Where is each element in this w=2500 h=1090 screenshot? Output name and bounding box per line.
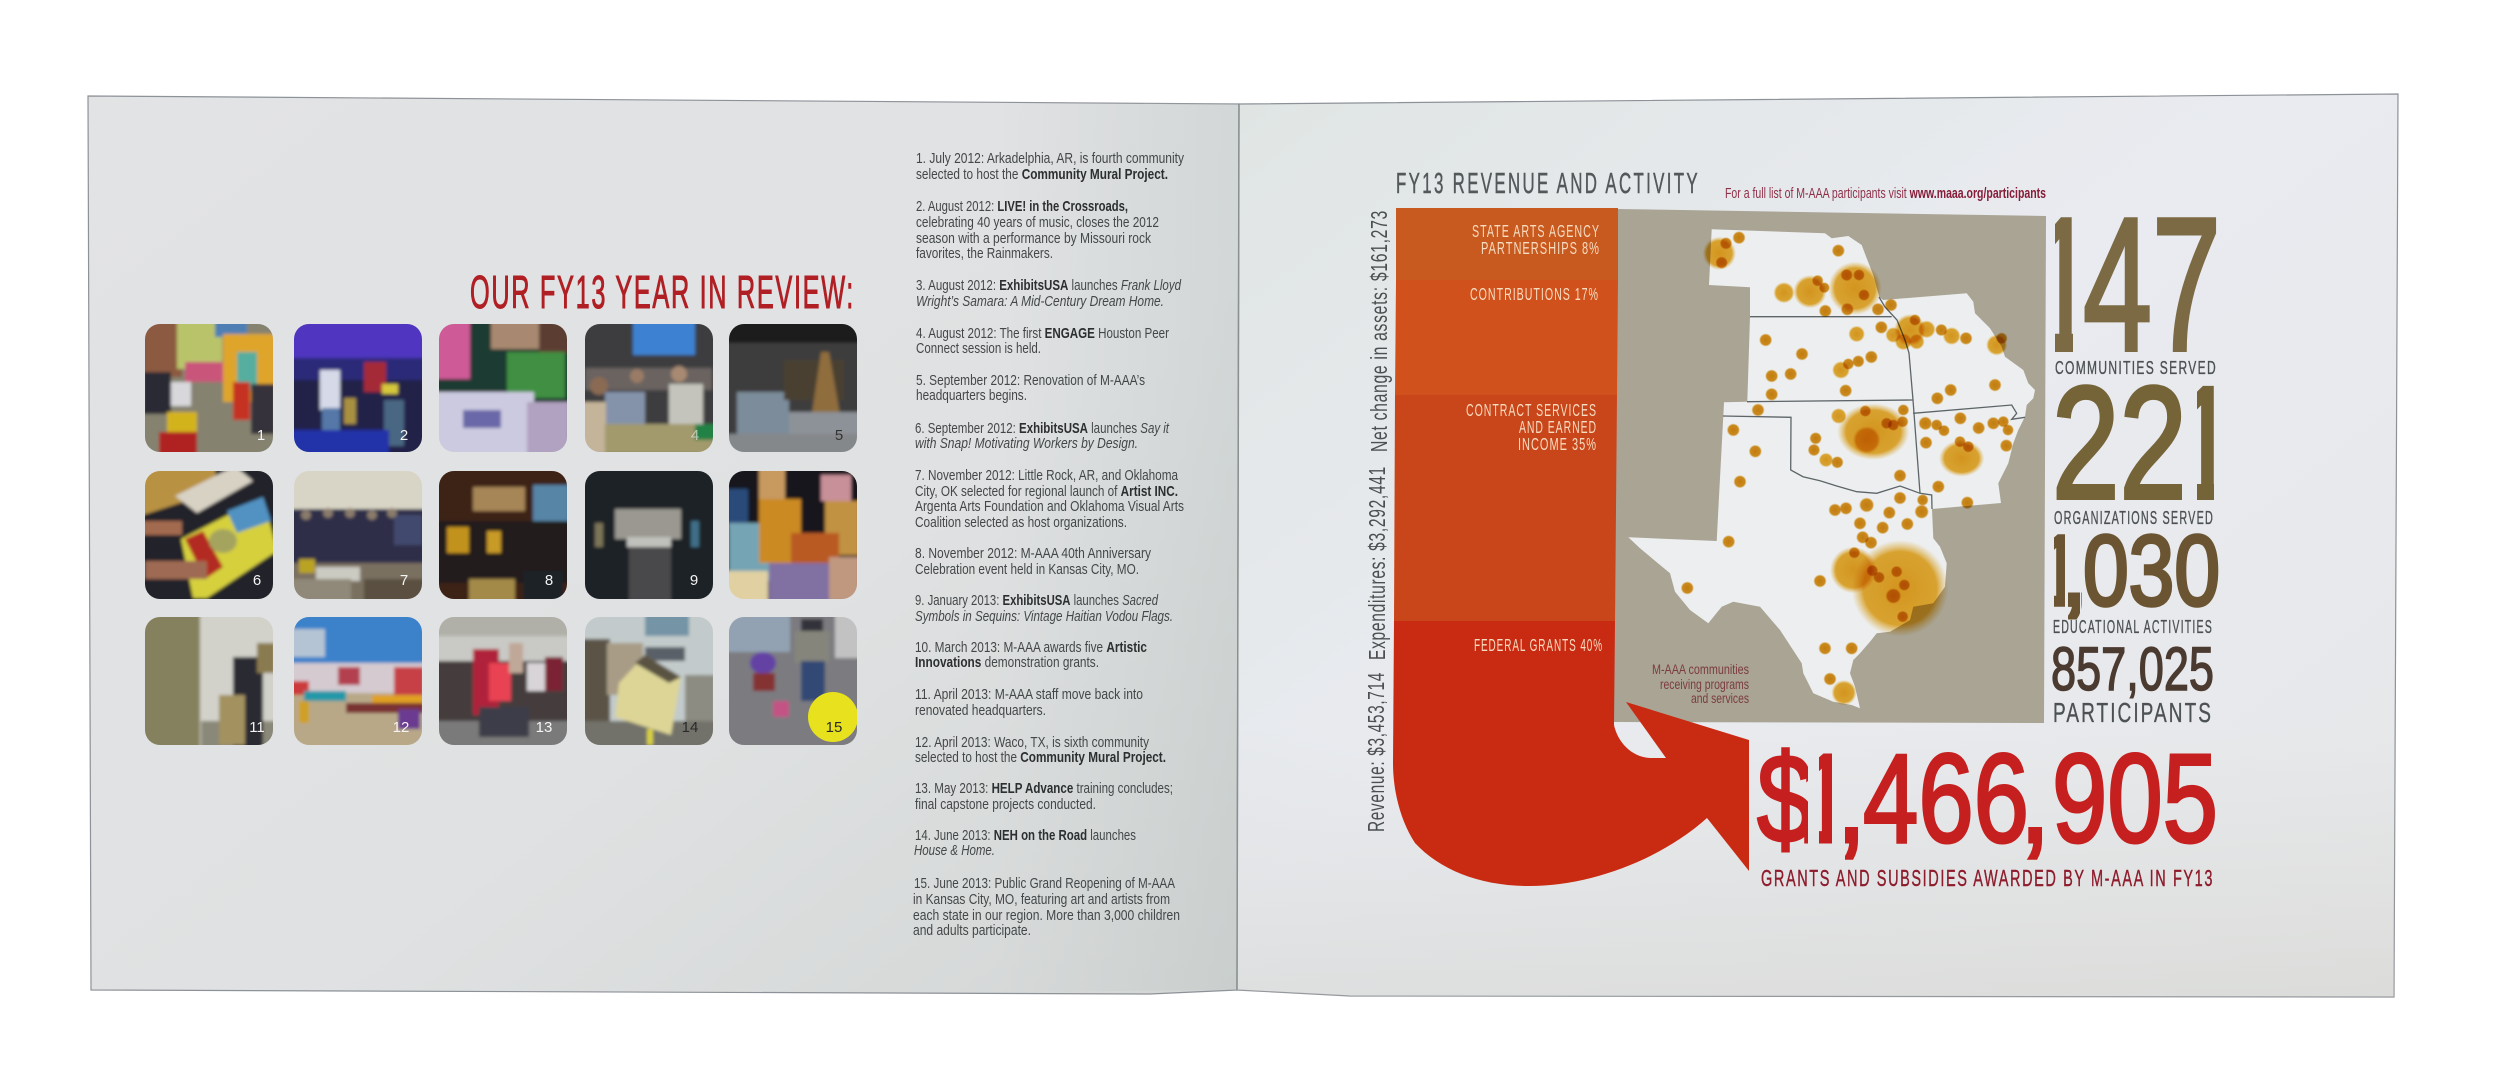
stat: communities served: 47: [2083, 179, 2221, 391]
timeline text list: 11. April 2013: M-AAA staff move back into: [915, 687, 1143, 703]
bar labels: CONTRACT SERVICES: [1466, 400, 1597, 420]
bar labels: FEDERAL GRANTS 40%: [1474, 635, 1603, 655]
timeline text list: 7. November 2012: Little Rock, AR, and Oklahoma: [915, 468, 1179, 484]
timeline text list: favorites, the Rainmakers.: [916, 246, 1053, 262]
vertical financial summary: Revenue: $3,453,714: [1363, 672, 1389, 832]
bar labels: [1466, 221, 1603, 655]
photo 13: HELP Advance group: [439, 617, 567, 745]
map legend: receiving programs: [1660, 676, 1749, 692]
big number: grants and subsidies: 466: [1863, 728, 2029, 869]
timeline text list: 4. August 2012: The first ENGAGE Houston Peer: [916, 326, 1169, 342]
timeline text list: each state in our region. More than 3,000 children: [913, 908, 1180, 924]
arrow: federal grants flowing to awards: [1393, 621, 1749, 886]
revenue stacked bar: [1394, 208, 1618, 622]
photo 15: public reopening: [729, 617, 857, 745]
timeline text list: Coalition selected as host organizations.: [915, 515, 1127, 531]
big number: grants and subsidies: $: [1757, 728, 1813, 869]
bar labels: INCOME 35%: [1518, 434, 1597, 454]
photo 12: Waco mural: 12: [393, 719, 409, 736]
vertical financial summary: Net change in assets: $161,273: [1366, 210, 1392, 452]
stat: participants: PARTICIPANTS: [2053, 697, 2213, 728]
map legend: M-AAA communities: [1652, 661, 1749, 677]
photo 6: hands on artwork: 6: [253, 572, 261, 589]
photo 9: gallery: 9: [690, 572, 698, 589]
region outline: [1628, 229, 2035, 708]
stat: organizations served: ORGANIZATIONS SERVED: [2054, 508, 2214, 528]
photo 10: performers with masks: [729, 471, 857, 599]
photo 5: renovation: [729, 324, 857, 452]
timeline text list: 10. March 2013: M-AAA awards five Artistic: [915, 640, 1147, 656]
stat: communities served: COMMUNITIES SERVED: [2055, 358, 2217, 378]
community dots north: [1703, 231, 2014, 509]
photo 7: group portrait: 7: [400, 572, 408, 589]
stat: educational activities: [2054, 533, 2218, 634]
stat: organizations served: 22: [2052, 353, 2187, 532]
timeline text list: selected to host the Community Mural Project.: [916, 167, 1168, 183]
stat: communities served: [2055, 217, 2216, 374]
timeline text list: House & Home.: [914, 843, 995, 859]
panel: right page: [1237, 94, 2398, 997]
bar labels: AND EARNED: [1519, 417, 1597, 437]
timeline text list: Symbols in Sequins: Vintage Haitian Vodou Flags.: [915, 609, 1173, 625]
timeline text list: and adults participate.: [913, 923, 1031, 939]
timeline text list: renovated headquarters.: [915, 703, 1046, 719]
community dots south: [1681, 491, 1948, 705]
timeline text list: 2. August 2012: LIVE! in the Crossroads,: [916, 199, 1128, 215]
timeline text list: celebrating 40 years of music, closes the 2012: [916, 215, 1159, 231]
stat: participants: [2051, 635, 2214, 728]
map of region: [1628, 229, 2035, 708]
photo 11: staff moving boxes: 11: [249, 719, 265, 736]
photo 6: hands on artwork: [145, 471, 273, 599]
timeline text list: headquarters begins.: [916, 388, 1027, 404]
photo 14: NEH house exhibit: 14: [682, 719, 698, 736]
timeline text list: 8. November 2012: M-AAA 40th Anniversary: [915, 546, 1152, 562]
vertical financial summary: Expenditures: $3,292,441: [1364, 466, 1390, 660]
timeline text list: 9. January 2013: ExhibitsUSA launches Sacred: [915, 593, 1159, 609]
photo 4: meeting room: 4: [691, 427, 699, 444]
timeline text list: 12. April 2013: Waco, TX, is sixth community: [915, 735, 1150, 751]
timeline text list: 5. September 2012: Renovation of M-AAA’s: [916, 373, 1145, 389]
timeline text list: Celebration event held in Kansas City, MO.: [915, 562, 1139, 578]
timeline text list: 13. May 2013: HELP Advance training concludes;: [915, 781, 1173, 797]
photo 9: gallery: [585, 471, 713, 599]
timeline text list: in Kansas City, MO, featuring art and artists from: [913, 892, 1170, 908]
photo 13: HELP Advance group: 13: [536, 719, 552, 736]
timeline text list: 14. June 2013: NEH on the Road launches: [915, 828, 1136, 844]
title: our FY13 year in review: OUR FY13 YEAR IN REVIEW:: [470, 266, 855, 318]
timeline text list: 15. June 2013: Public Grand Reopening of M-AAA: [914, 876, 1175, 892]
photo 11: staff moving boxes: [145, 617, 273, 745]
bar labels: STATE ARTS AGENCY: [1472, 221, 1600, 241]
stat: educational activities: EDUCATIONAL ACTIVITIES: [2053, 617, 2213, 637]
timeline text list: [913, 151, 1185, 939]
brochure spread photo: [87, 93, 2399, 998]
timeline text list: season with a performance by Missouri rock: [916, 231, 1152, 247]
stat: communities served: 1: [2032, 179, 2095, 391]
timeline text list: 3. August 2012: ExhibitsUSA launches Frank Lloyd: [916, 278, 1182, 294]
photo 8: anniversary celebration: [439, 471, 567, 599]
big number: grants and subsidies: 905: [2052, 728, 2218, 869]
photo 8: anniversary celebration: 8: [545, 572, 553, 589]
timeline text list: with Snap! Motivating Workers by Design.: [915, 436, 1138, 452]
photo 1: mural: [145, 324, 273, 452]
photo 7: group portrait: [294, 471, 422, 599]
photo 2: band on stage: [294, 324, 422, 452]
map background panel: [1613, 209, 2046, 723]
photo 2: band on stage: 2: [400, 427, 408, 444]
map legend: [1652, 661, 1749, 706]
state borders: [1723, 297, 2025, 509]
stat: organizations served: 1: [2174, 353, 2236, 532]
stat: educational activities: 1: [2038, 515, 2082, 627]
vertical financial summary: [1363, 210, 1392, 832]
photo 14: NEH house exhibit: [585, 617, 713, 745]
photo 15: public reopening: 15: [826, 719, 842, 736]
photo 1: mural: 1: [257, 427, 265, 444]
timeline text list: Innovations demonstration grants.: [915, 655, 1099, 671]
photo 5: renovation: 5: [835, 427, 843, 444]
note: participants link: For a full list of M-AAA participants visit www.maaa.org/participants: [1725, 186, 2046, 202]
bar labels: CONTRIBUTIONS 17%: [1470, 284, 1599, 304]
timeline text list: 1. July 2012: Arkadelphia, AR, is fourth community: [916, 151, 1185, 167]
panel: left page: [88, 96, 1239, 994]
bar labels: PARTNERSHIPS 8%: [1481, 238, 1600, 258]
timeline text list: Connect session is held.: [916, 341, 1041, 357]
photo 4: meeting room: [585, 324, 713, 452]
stat: participants: 857,025: [2051, 635, 2214, 703]
timeline text list: final capstone projects conducted.: [915, 797, 1096, 813]
stat: educational activities: 030: [2083, 515, 2220, 627]
stat: educational activities: ,: [2059, 515, 2090, 627]
heading: FY13 revenue and activity: FY13 REVENUE AND ACTIVITY: [1396, 168, 1700, 200]
map legend: and services: [1691, 690, 1749, 706]
photo grid: [140, 319, 861, 749]
big number: grants and subsidies: ,: [2019, 728, 2051, 869]
timeline text list: City, OK selected for regional launch of Artist INC.: [915, 484, 1178, 500]
timeline text list: Wright’s Samara: A Mid-Century Dream Home.: [916, 294, 1164, 310]
big number: grants and subsidies: 1: [1798, 728, 1854, 869]
timeline text list: 6. September 2012: ExhibitsUSA launches Say it: [915, 421, 1170, 437]
photo 3: visitors at exhibit: [439, 324, 567, 452]
big number: grants and subsidies: GRANTS AND SUBSIDIES AWARDED BY M-AAA IN FY13: [1761, 865, 2214, 891]
timeline text list: Argenta Arts Foundation and Oklahoma Visual Arts: [915, 499, 1184, 515]
timeline text list: selected to host the Community Mural Project.: [915, 750, 1166, 766]
big number: grants and subsidies: ,: [1835, 728, 1867, 869]
big number: grants and subsidies: [1756, 747, 2215, 886]
photo 12: Waco mural: [294, 617, 422, 745]
